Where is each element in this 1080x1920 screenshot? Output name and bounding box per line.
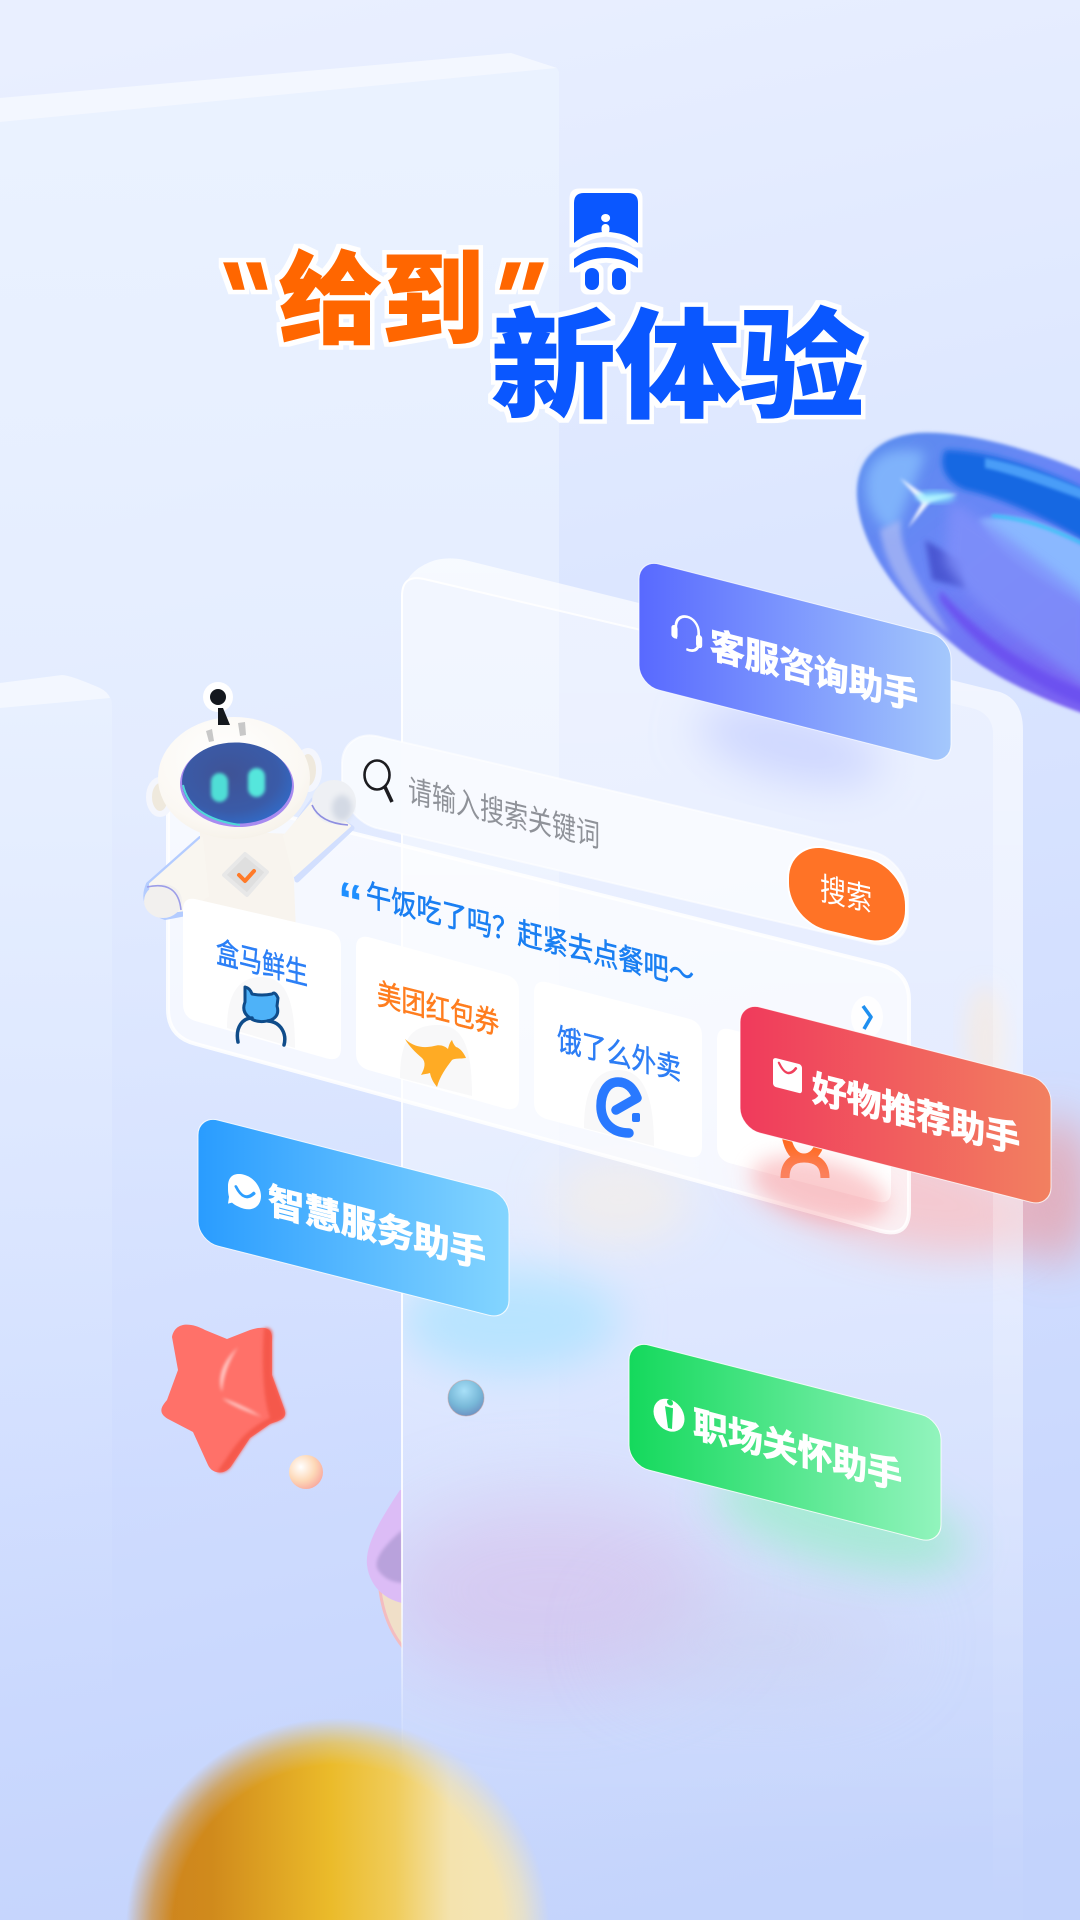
next arrow button [851, 996, 883, 1038]
icon: e logo [584, 1070, 654, 1146]
search bar [342, 728, 908, 952]
coral star [161, 1325, 285, 1473]
opening quote: " [209, 238, 298, 361]
blurred yellow sphere [128, 1720, 545, 1920]
title: logo icon [574, 193, 638, 290]
robot visor [178, 740, 296, 830]
glass ring [857, 433, 1080, 716]
tile label: 饿了么外卖 [557, 1022, 681, 1087]
prompt text: 午饭吃了吗？赶紧去点餐吧～ [366, 878, 694, 994]
card: smart service assistant [198, 1115, 509, 1320]
side colour glows [704, 985, 1080, 1592]
icon: shopping bag [773, 1057, 802, 1094]
card: workplace care assistant [629, 1340, 941, 1545]
search placeholder: 请输入搜索关键词 [408, 773, 600, 854]
large back slab, top left [0, 53, 559, 1500]
title second line: 新体验 [491, 302, 865, 434]
purple mushroom decoration [366, 1490, 402, 1648]
closing quote: " [469, 238, 559, 361]
card label: 客服咨询助手 [710, 625, 918, 718]
quick menu card [168, 793, 909, 1232]
prompt quote mark: “ [338, 870, 363, 932]
card label: 智慧服务助手 [268, 1180, 486, 1276]
pink glow over fourth tile [745, 1144, 895, 1236]
tile label: 美团红包券 [377, 977, 499, 1041]
robot arms [150, 798, 350, 912]
robot head [158, 717, 310, 839]
quick menu tile: Ele.me [534, 982, 702, 1157]
card label: 好物推荐助手 [812, 1068, 1020, 1161]
search bar background [342, 728, 908, 952]
card: customer service assistant [639, 559, 951, 765]
icon: headset [671, 613, 702, 654]
icon: magnifier [364, 760, 392, 802]
icon: leaf person [654, 1395, 684, 1435]
title first line: 给到 [279, 245, 484, 357]
search button: 搜索 [820, 871, 872, 918]
small back slab, left [0, 675, 112, 1720]
robot antenna [203, 682, 246, 742]
tile label: 盒马鲜生 [216, 935, 308, 992]
quick menu tile: fourth [717, 1029, 891, 1202]
robot ears [149, 751, 319, 814]
peach sphere [289, 1455, 323, 1489]
title: 给到 with quotes [209, 238, 559, 361]
icon: kangaroo [400, 1025, 472, 1096]
card label: 职场关怀助手 [693, 1404, 902, 1497]
blue sphere [448, 1380, 484, 1416]
quick menu tile: Hema [183, 899, 341, 1059]
card: shopping recommendation assistant [740, 1002, 1051, 1207]
glass phone panel [402, 558, 1023, 1920]
robot badge with check [224, 854, 267, 895]
icon: hippo [227, 977, 295, 1048]
blurred colour glows behind glass [380, 689, 900, 1690]
icon: chat smile [228, 1171, 261, 1213]
quick menu tile: Meituan [356, 937, 519, 1109]
icon: orange figure [785, 1135, 825, 1178]
title: logo dots [601, 214, 610, 234]
robot arms outline [145, 800, 352, 918]
robot body [200, 830, 296, 932]
robot mascot [144, 682, 356, 932]
robot hands [144, 780, 356, 918]
search button [787, 838, 907, 951]
